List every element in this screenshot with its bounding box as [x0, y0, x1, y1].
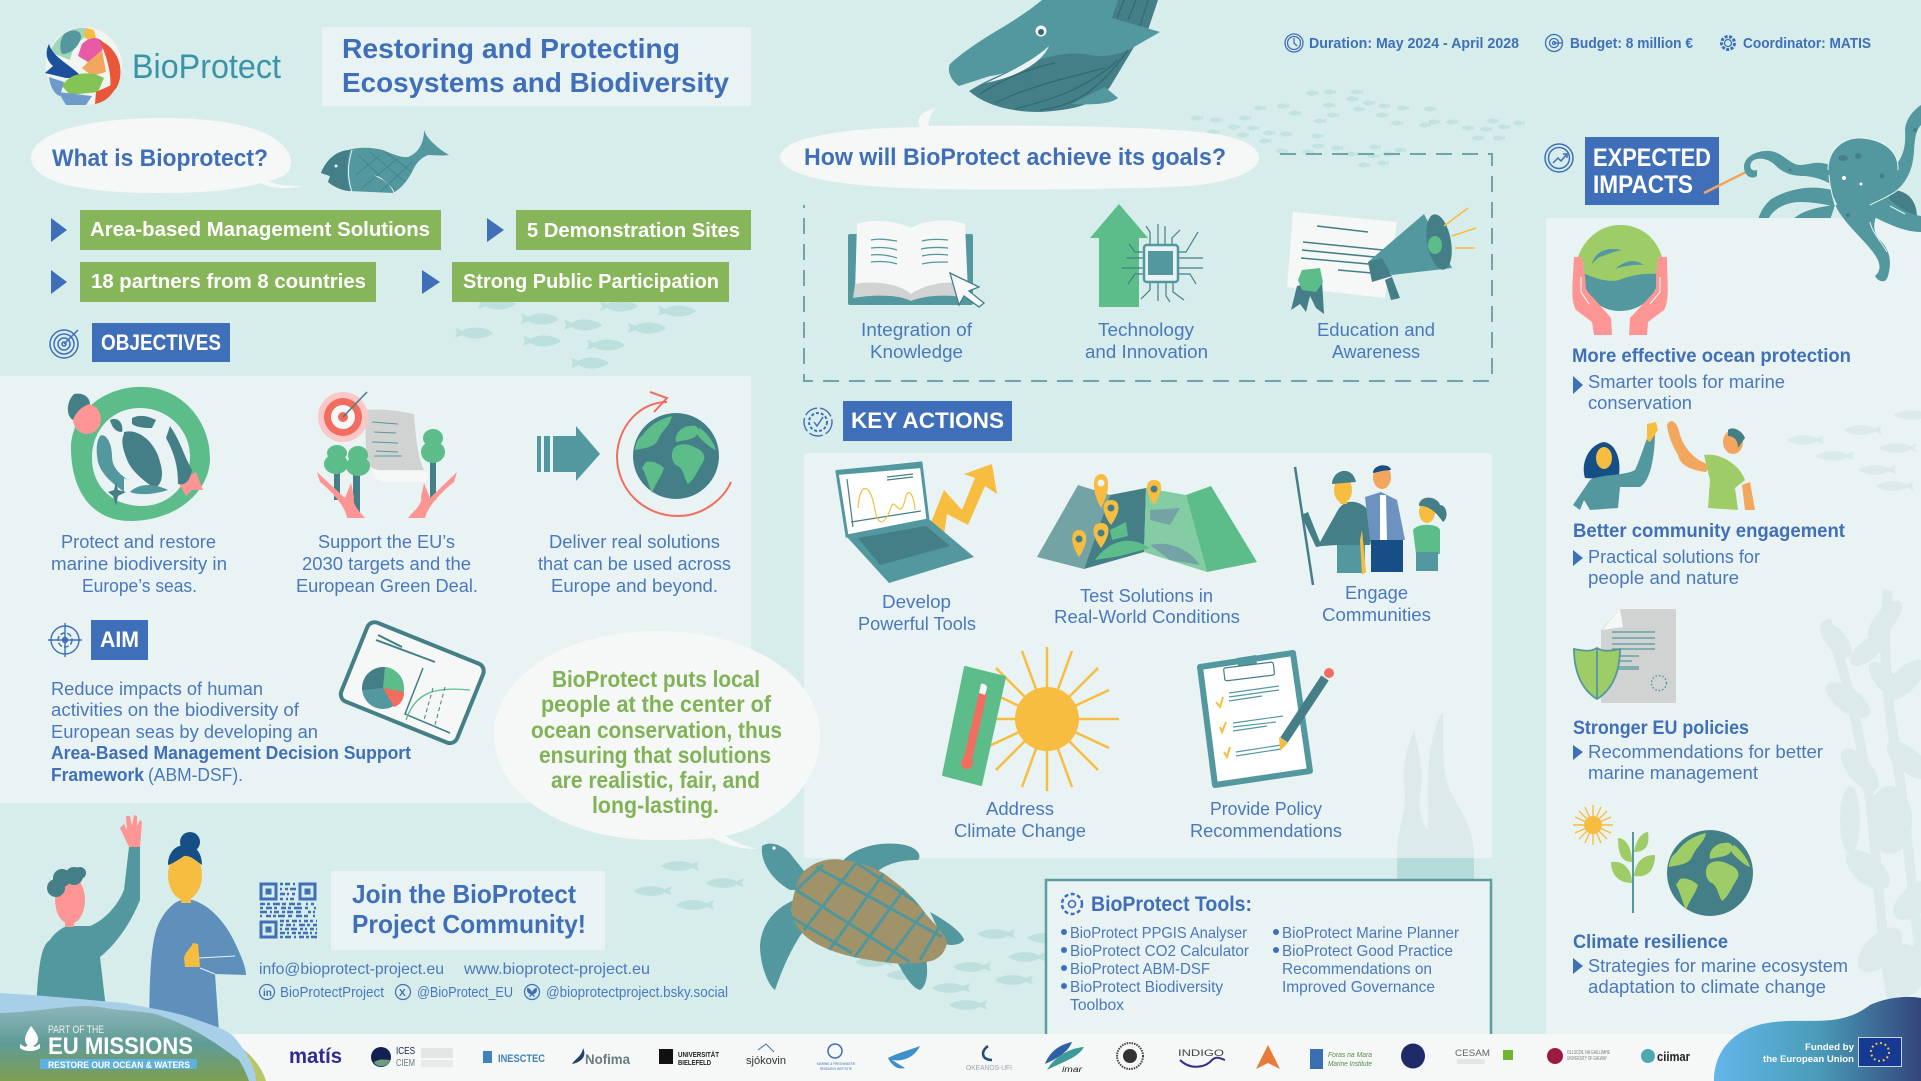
key facts: [51, 210, 751, 302]
icon: clipboard and pencil: [1200, 653, 1334, 785]
logo: matis: matís: [289, 1045, 342, 1068]
tools list: column two: Recommendations on: [1282, 961, 1432, 978]
fish school near whale: [1191, 89, 1525, 168]
impact 1 text: [1572, 346, 1851, 413]
tools list: column one: BioProtect ABM-DSF: [1070, 961, 1210, 978]
callout bubble: local people: ensuring that solutions: [539, 742, 771, 768]
heading: objectives: OBJECTIVES: [101, 330, 221, 355]
call to action: join community: Project Community!: [352, 909, 586, 939]
logo emblem: [45, 27, 122, 105]
logo: [45, 27, 282, 105]
impact 4 text: adaptation to climate change: [1588, 977, 1826, 997]
contact links: www.bioprotect-project.eu: [463, 961, 650, 978]
fact: area-based management: Area-based Management Solutions: [90, 219, 430, 241]
logo: ICES: [371, 1046, 453, 1069]
goal 2 text: Technology: [1098, 320, 1194, 340]
objective 2 text: European Green Deal.: [296, 576, 478, 596]
icon: laptop and rising arrow: [836, 462, 997, 583]
aim paragraph: Framework: [51, 765, 145, 785]
action 1 text: Powerful Tools: [858, 614, 976, 634]
icon: sun and thermometer: [943, 647, 1119, 791]
action 2 text: Real-World Conditions: [1054, 607, 1240, 627]
fish school near turtle: [634, 861, 1065, 1010]
icon: target, scroll, trees and hands: [317, 392, 457, 518]
qr code: [259, 882, 317, 939]
linkedin: in: [263, 988, 272, 999]
tools list: column one: BioProtect PPGIS Analyser: [1070, 925, 1248, 942]
action: engage communities: [1295, 465, 1447, 625]
impact: climate resilience: [1573, 805, 1848, 997]
fact: area-based management: [51, 210, 441, 250]
logo: ICES: CIEM: [396, 1058, 415, 1069]
logo: INESCTEC: [483, 1051, 545, 1065]
title text: Restoring and Protecting: [342, 33, 680, 64]
impact 3 text: marine management: [1588, 763, 1758, 783]
fact: public participation: [422, 262, 729, 302]
objective 2 text: 2030 targets and the: [302, 554, 471, 574]
logo: INESCTEC: INESCTEC: [498, 1053, 545, 1065]
icon: gears: [1062, 894, 1082, 914]
goal 1 text: Integration of: [861, 320, 973, 340]
project facts: [1285, 34, 1871, 52]
logo: Universitat Bielefeld: [659, 1049, 720, 1067]
icon: folded map with pins: [1037, 474, 1257, 572]
logo: marine and freshwater research institute: RESEARCH INSTITUTE: [820, 1066, 852, 1071]
logo: imar: imar: [1062, 1065, 1082, 1074]
logo: university seal: [1117, 1043, 1143, 1069]
panel: expected impacts background: [1546, 218, 1921, 1034]
fact: budget: Budget: 8 million €: [1570, 35, 1694, 52]
logo: marine and freshwater research institute: [817, 1044, 855, 1071]
callout bubble: local people: ocean conservation, thus: [531, 717, 782, 743]
illustration: tablet with charts: [338, 620, 486, 745]
badge: EU missions: RESTORE OUR OCEAN & WATERS: [48, 1060, 190, 1070]
logo: Okeanos: [966, 1046, 1012, 1072]
logo: Nofima: Nofima: [585, 1051, 630, 1067]
icon: certificate and megaphone: [1287, 208, 1476, 314]
octopus back tentacles: [1758, 188, 1835, 220]
contact links: info@bioprotect-project.eu: [259, 961, 444, 978]
logo: Foras na Mara: [1310, 1049, 1372, 1069]
icon: target: [50, 330, 78, 358]
icon: arrow and chip: [1090, 204, 1203, 307]
person one: [35, 815, 142, 1060]
objective 3 text: Europe and beyond.: [551, 576, 718, 596]
heading: objectives: [50, 323, 230, 362]
aim paragraph: (ABM-DSF).: [148, 765, 243, 785]
tools list: column two: BioProtect Marine Planner: [1282, 925, 1460, 942]
logo: feather: [888, 1046, 920, 1069]
icon: rising chart: [1545, 144, 1573, 172]
objective 3: real solutions: [537, 392, 731, 596]
illustration: two people waving: [35, 815, 246, 1060]
action 4 text: Address: [986, 799, 1054, 819]
impact 2 text: [1573, 521, 1846, 588]
logo: Indigo Med: [1178, 1048, 1225, 1067]
objective 3 text: Deliver real solutions: [549, 532, 720, 552]
bluesky account: @bioprotectproject.bsky.social: [546, 984, 728, 1001]
impact: better community engagement: [1573, 421, 1846, 588]
impact 2 text: Practical solutions for: [1588, 547, 1760, 567]
logo: Indigo Med: INDIGO: [1178, 1048, 1224, 1058]
fact: partners: [51, 262, 376, 302]
callout bubble: local people: [494, 631, 820, 849]
impact 3 text: [1573, 718, 1823, 783]
impact: more effective ocean protection: [1572, 225, 1851, 413]
impact 3 text: Stronger EU policies: [1573, 718, 1749, 739]
aim paragraph: European seas by developing an: [51, 722, 318, 742]
badge: funded by the European Union: [1714, 997, 1921, 1081]
heading: expected impacts: [1545, 137, 1719, 205]
fact: partners: 18 partners from 8 countries: [91, 271, 366, 293]
impact 1 text: conservation: [1588, 393, 1692, 413]
action 3 text: Communities: [1322, 605, 1431, 625]
action: policy recommendations: [1190, 653, 1342, 841]
panel: objectives: [0, 376, 751, 803]
tools list: column one: [1061, 925, 1250, 1014]
tools list: column two: [1273, 925, 1460, 996]
goal 1 text: [861, 320, 973, 362]
linkedin: BioProtectProject: [280, 984, 385, 1001]
goal 2 text: [1085, 320, 1208, 362]
goal 2 text: and Innovation: [1085, 342, 1208, 362]
impact 4 text: [1573, 932, 1848, 997]
icon: hands holding ocean globe: [1572, 225, 1668, 335]
logo: University of Galway: UNIVERSITY OF GALWAY: [1567, 1056, 1607, 1062]
aim paragraph: Reduce impacts of human: [51, 679, 263, 699]
seaweed below key actions panel: [1397, 858, 1474, 880]
goal: integration of knowledge: [848, 221, 984, 362]
title box: [322, 27, 751, 106]
goal: technology and innovation: [1085, 204, 1208, 362]
action: address climate change: [943, 647, 1119, 841]
objective 3 text: [538, 532, 731, 596]
impact 1 text: More effective ocean protection: [1572, 346, 1851, 367]
action 4 text: Climate Change: [954, 821, 1086, 841]
tools list: column two: BioProtect Good Practice: [1282, 943, 1453, 960]
action 2 text: [1054, 586, 1240, 627]
impact 4 text: Strategies for marine ecosystem: [1588, 956, 1848, 976]
badge: funded by the European Union: the European Union: [1763, 1054, 1854, 1065]
contact links: [259, 961, 650, 978]
objective 2: EU 2030 targets: [296, 392, 478, 596]
impact 1 text: Smarter tools for marine: [1588, 372, 1785, 392]
logo: triangle: [1256, 1045, 1280, 1069]
impact 3 text: Recommendations for better: [1588, 742, 1823, 762]
call to action: join community: [331, 871, 605, 950]
action 3 text: [1322, 583, 1431, 625]
icon: fish: [321, 130, 449, 193]
objective 2 text: [296, 532, 478, 596]
title: [322, 27, 751, 106]
speech bubble: what is bioprotect: [31, 118, 304, 193]
callout bubble: local people: long-lasting.: [592, 792, 719, 818]
fact: coordinator: Coordinator: MATIS: [1743, 35, 1871, 52]
logo: navy seal: [1401, 1044, 1425, 1068]
goal 3 text: Education and: [1317, 320, 1435, 340]
callout bubble: local people: are realistic, fair, and: [551, 767, 760, 793]
logo wordmark: BioProtect: [132, 48, 282, 86]
decorative fish in impacts panel: [1786, 410, 1921, 491]
call to action: join community: Join the BioProtect: [352, 879, 576, 909]
icon: sun, plant and globe: [1573, 805, 1753, 916]
aim paragraph: Area-Based Management Decision Support: [51, 743, 411, 763]
action 3 text: Engage: [1345, 583, 1408, 603]
illustration: whale: [949, 0, 1160, 112]
callout bubble: local people: BioProtect puts local: [552, 666, 760, 692]
logo: Sjokovin: sjókovin: [746, 1055, 786, 1067]
tools list: column one: Toolbox: [1070, 997, 1124, 1014]
action: develop powerful tools: [836, 462, 997, 634]
logo: Sjokovin: [746, 1044, 786, 1067]
fact: duration: Duration: May 2024 - April 2028: [1309, 35, 1519, 52]
fact: public participation: Strong Public Participation: [463, 271, 719, 293]
action 5 text: [1190, 799, 1342, 841]
logo: Nofima: [572, 1048, 630, 1067]
action: test solutions: [1037, 474, 1257, 627]
logo: CESAM: CESAM: [1455, 1048, 1490, 1058]
goal 3 text: [1317, 320, 1435, 362]
decorative seaweed in impacts panel: [1814, 590, 1921, 1010]
panel: bioprotect tools: [1046, 880, 1491, 1040]
action 2 text: Test Solutions in: [1080, 586, 1213, 606]
heading: expected impacts: EXPECTED: [1593, 144, 1711, 172]
icon: fisher, official and child: [1295, 465, 1447, 585]
goal 1 text: Knowledge: [870, 342, 963, 362]
objective 1 text: Protect and restore: [61, 532, 216, 552]
fact: demonstration sites: [487, 210, 751, 250]
flag: EU: [1858, 1038, 1902, 1066]
icon: drop and waves: [20, 1026, 40, 1051]
speech bubble: how will bioprotect achieve its goals: How will BioProtect achieve its goals?: [804, 144, 1226, 171]
logo: University of Galway: OLLSCOIL NA GAILLIMHE: [1567, 1050, 1610, 1056]
heading: expected impacts: IMPACTS: [1593, 171, 1693, 199]
fact: demonstration sites: 5 Demonstration Sites: [527, 220, 740, 242]
goal: education and awareness: [1287, 208, 1476, 362]
speech bubble: what is bioprotect: What is Bioprotect?: [52, 145, 268, 172]
illustration: sea turtle: [760, 844, 964, 990]
badge: funded by the European Union: Funded by: [1805, 1042, 1855, 1053]
logo: ciimar: ciimar: [1657, 1049, 1690, 1064]
icon: ring with marine life: [68, 387, 210, 521]
logo: marine and freshwater research institute: MARINE & FRESHWATER: [817, 1061, 855, 1066]
logo: CESAM: [1455, 1048, 1513, 1064]
objective 1 text: marine biodiversity in: [51, 554, 227, 574]
badge: EU missions: EU MISSIONS: [48, 1033, 193, 1060]
panel: bioprotect tools: BioProtect Tools:: [1091, 893, 1252, 916]
action 1 text: Develop: [882, 592, 951, 612]
illustration: octopus: [1704, 105, 1921, 281]
impact 4 text: Climate resilience: [1573, 932, 1728, 953]
impact 2 text: Better community engagement: [1573, 521, 1846, 542]
logo: ciimar: [1641, 1049, 1690, 1064]
icon: gear check: [804, 408, 832, 436]
objective 3 text: that can be used across: [538, 554, 731, 574]
panel: key actions: [804, 453, 1492, 858]
icon: open book with cursor: [848, 221, 984, 307]
icon: document and shield: [1574, 609, 1676, 703]
dashed frame: goals: [804, 154, 1492, 381]
title text: [342, 33, 729, 98]
decorative seaweed: [1397, 713, 1474, 858]
callout bubble: local people: people at the center of: [541, 691, 771, 717]
social links: [260, 984, 728, 1001]
icon: crosshair: [48, 623, 82, 657]
x account: @BioProtect_EU: [417, 984, 513, 1001]
logo: ICES: ICES: [396, 1046, 415, 1057]
objective 1 text: [51, 532, 227, 596]
logo: Okeanos: OKEANOS-UFI: [966, 1065, 1012, 1072]
heading: aim: AIM: [100, 627, 139, 652]
speech bubble: how will bioprotect achieve its goals: [780, 108, 1259, 190]
objective 1: protect marine biodiversity: [51, 387, 227, 596]
impact: stronger EU policies: [1573, 609, 1823, 783]
heading: key actions: KEY ACTIONS: [851, 408, 1004, 433]
title text: Ecosystems and Biodiversity: [342, 67, 729, 98]
action 5 text: Recommendations: [1190, 821, 1342, 841]
impact 2 text: people and nature: [1588, 568, 1739, 588]
footer strip with partner logos: [0, 1034, 1921, 1081]
tools list: column one: BioProtect CO2 Calculator: [1070, 943, 1250, 960]
badge: EU missions: PART OF THE: [48, 1024, 104, 1036]
heading: aim: [48, 620, 148, 660]
logo: Universitat Bielefeld: BIELEFELD: [678, 1060, 711, 1067]
fish school near objectives: [455, 298, 696, 369]
action 1 text: [858, 592, 976, 634]
x account: X: [399, 988, 406, 999]
action 5 text: Provide Policy: [1210, 799, 1322, 819]
person two: [149, 832, 246, 1060]
aim paragraph: [51, 679, 411, 785]
icon: arrow to globe: [537, 392, 731, 516]
logo: imar: [1045, 1042, 1084, 1074]
logo: University of Galway: [1547, 1048, 1610, 1064]
goal 3 text: Awareness: [1332, 342, 1420, 362]
tools list: column two: Improved Governance: [1282, 979, 1435, 996]
objective 1 text: Europe’s seas.: [82, 576, 197, 596]
objective 2 text: Support the EU’s: [318, 532, 455, 552]
tools list: column one: BioProtect Biodiversity: [1070, 979, 1223, 996]
logo: Foras na Mara: Marine Institute: [1328, 1061, 1372, 1068]
aim paragraph: activities on the biodiversity of: [51, 700, 300, 720]
logo: Foras na Mara: Foras na Mara: [1328, 1052, 1372, 1059]
icon: high five: [1573, 421, 1755, 510]
action 4 text: [954, 799, 1086, 841]
heading: key actions: [804, 401, 1012, 441]
logo: Universitat Bielefeld: UNIVERSITÄT: [678, 1051, 720, 1059]
badge: EU missions: [0, 993, 266, 1081]
